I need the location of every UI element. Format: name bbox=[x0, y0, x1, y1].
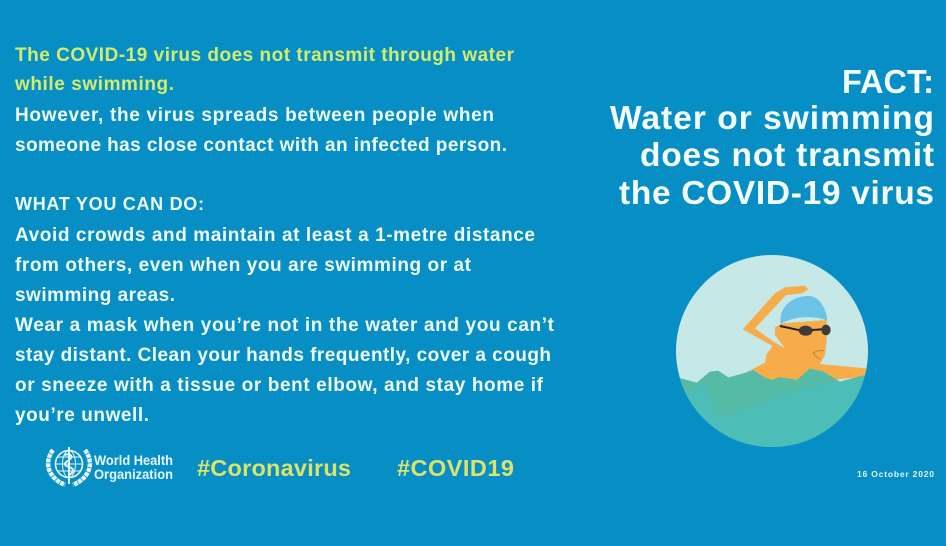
fact headline bbox=[610, 64, 934, 212]
key message in yellow: The COVID-19 virus does not transmit through water bbox=[15, 45, 515, 66]
explanation text bbox=[15, 105, 507, 156]
hashtags: #Coronavirus bbox=[197, 455, 351, 481]
what you can do advice: Wear a mask when you’re not in the water and you can’t bbox=[15, 315, 555, 336]
water front bbox=[687, 379, 864, 447]
swimmer illustration bbox=[673, 255, 868, 460]
what you can do advice: stay distant. Clean your hands frequently, cover a cough bbox=[15, 345, 551, 366]
hashtags: #COVID19 bbox=[397, 455, 514, 481]
fact headline: FACT: bbox=[842, 64, 934, 101]
what you can do advice: you’re unwell. bbox=[15, 405, 149, 426]
date: 16 October 2020 bbox=[857, 469, 934, 479]
organisation name: Organization bbox=[94, 466, 173, 482]
swim cap bbox=[780, 296, 827, 324]
what you can do advice bbox=[15, 194, 555, 426]
what you can do advice: Avoid crowds and maintain at least a 1-metre distance bbox=[15, 225, 535, 246]
fact headline: the COVID-19 virus bbox=[619, 175, 934, 212]
icon: WHO emblem bbox=[48, 447, 90, 485]
hashtags bbox=[197, 455, 514, 481]
organisation name bbox=[94, 452, 173, 482]
swimmer body and arm bbox=[742, 286, 866, 380]
WHO logo bbox=[48, 447, 173, 485]
mouth detail bbox=[813, 350, 824, 359]
icon: sky circle bbox=[676, 255, 868, 447]
explanation text: someone has close contact with an infected person. bbox=[15, 135, 507, 156]
key message in yellow: while swimming. bbox=[14, 74, 174, 95]
what you can do advice: or sneeze with a tissue or bent elbow, and stay home if bbox=[15, 375, 544, 396]
fact headline: does not transmit bbox=[640, 137, 934, 174]
key message in yellow bbox=[14, 45, 515, 95]
explanation text: However, the virus spreads between people when bbox=[15, 105, 494, 126]
what you can do advice: WHAT YOU CAN DO: bbox=[15, 194, 204, 214]
what you can do advice: swimming areas. bbox=[15, 285, 175, 306]
what you can do advice: from others, even when you are swimming or at bbox=[15, 255, 472, 276]
water back wave bbox=[680, 368, 865, 447]
organisation name: World Health bbox=[94, 452, 173, 468]
infographic canvas bbox=[15, 47, 934, 487]
fact headline: Water or swimming bbox=[610, 100, 934, 137]
goggles bbox=[780, 326, 822, 330]
